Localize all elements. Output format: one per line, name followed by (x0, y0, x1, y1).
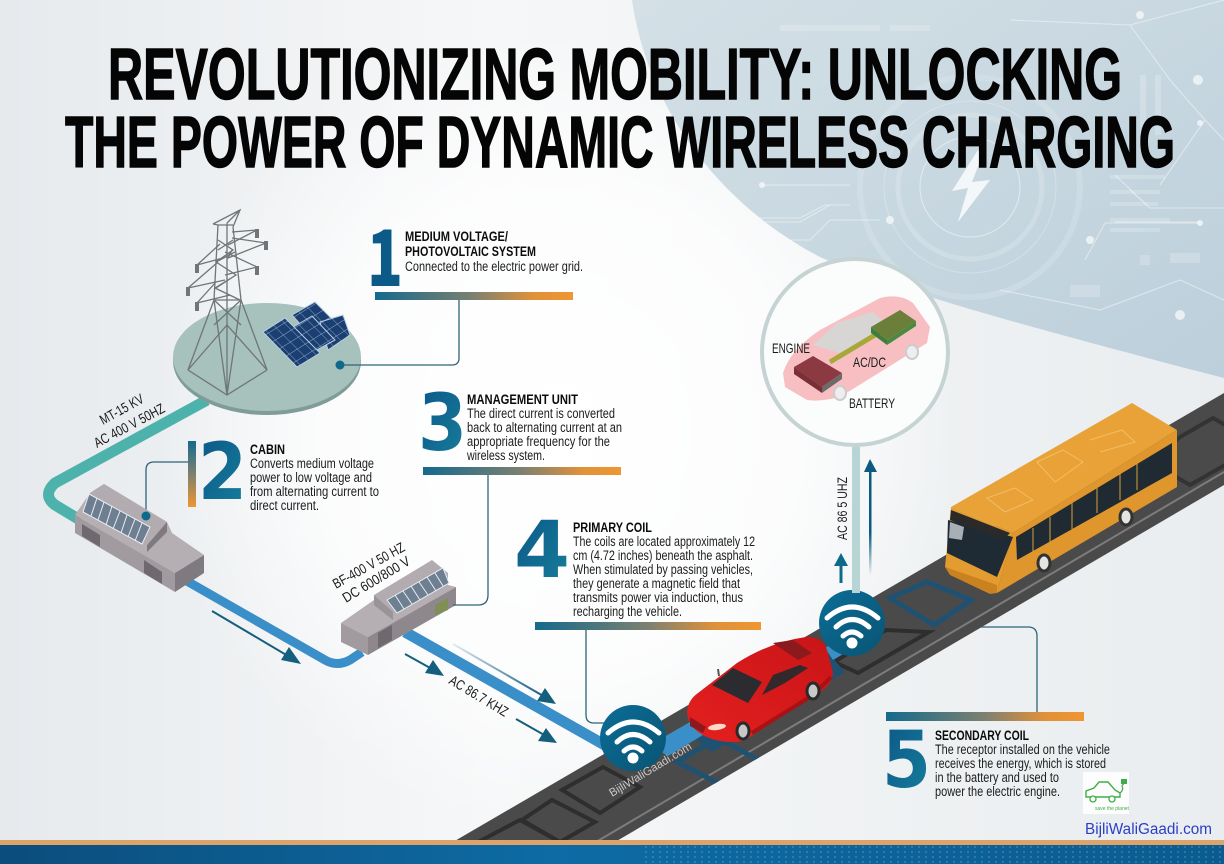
step 1 text: Connected to the electric power grid. (405, 259, 583, 274)
step 4 text: recharging the vehicle. (573, 604, 682, 619)
label: inverter output: DC 600/800 V (339, 552, 413, 606)
tech background panel (632, 0, 1224, 378)
step 5 text: receives the energy, which is stored (935, 756, 1106, 771)
step 4 text: PRIMARY COIL (573, 520, 652, 535)
step 5 bar (886, 712, 1084, 721)
step 3 bar (423, 467, 621, 475)
icon: wifi badge left (600, 705, 666, 771)
step 2 text: from alternating current to (250, 484, 379, 499)
inset labels: BATTERY (849, 395, 895, 411)
inverter building (341, 560, 456, 655)
watermark on road: BijliWaliGaadi.com (607, 741, 694, 800)
step 2 number: 2 (198, 428, 247, 518)
step 2 text: direct current. (250, 498, 319, 513)
connector: step 3 (453, 475, 488, 605)
connector: step 5 (981, 627, 1037, 712)
bus windscreen (947, 520, 1013, 577)
label: inverter output: BF-400 V 50 HZ (330, 539, 408, 592)
inset: car powertrain (762, 259, 948, 445)
stem to car inset (852, 443, 860, 593)
arrow: to primary coil upper (453, 644, 556, 704)
step 2 text: power to low voltage and (250, 470, 372, 485)
inset labels (772, 340, 895, 411)
step 4 text: When stimulated by passing vehicles, (573, 562, 753, 577)
wheels (737, 683, 819, 739)
label: AC frequency: AC 86.7 KHZ (446, 672, 512, 720)
marker dot (142, 512, 150, 520)
step 1 text: MEDIUM VOLTAGE/ (405, 229, 508, 244)
step 4 number: 4 (514, 506, 570, 596)
inset labels: ENGINE (772, 340, 810, 356)
red car (687, 637, 833, 742)
footer band (0, 840, 1224, 864)
road with coils (453, 393, 1224, 842)
step 2 bar (188, 441, 196, 507)
solar roof (387, 568, 449, 613)
marker dot (336, 360, 344, 370)
bus wheels (1038, 509, 1132, 571)
step 5 text: SECONDARY COIL (935, 728, 1029, 743)
step 2 text: Converts medium voltage (250, 456, 374, 471)
step 3 text: appropriate frequency for the (467, 434, 610, 449)
logo: green EV car: save the planet (1095, 806, 1130, 812)
title (65, 35, 1175, 183)
logo: green EV car (1083, 772, 1130, 814)
step 4 text: they generate a magnetic field that (573, 576, 740, 591)
step 1 bar (375, 292, 573, 300)
brand URL: BijliWaliGaadi.com (1085, 821, 1212, 838)
step 5 text: power the electric engine. (935, 784, 1060, 799)
step 3 number: 3 (418, 379, 467, 469)
label: MT-15 KV: MT-15 KV (97, 390, 147, 428)
step 3 text: back to alternating current at an (467, 420, 622, 435)
arrow: cabin to inverter (212, 611, 301, 664)
arrow: short up (834, 553, 848, 583)
teal cable (48, 400, 207, 520)
bus windows (1016, 443, 1172, 560)
step 3 text: The direct current is converted (467, 406, 615, 421)
step 5 number: 5 (882, 716, 931, 806)
inset labels: AC/DC (853, 354, 886, 370)
yellow bus (945, 403, 1177, 594)
step 3 text (466, 392, 622, 463)
arrow: short mid (405, 654, 444, 676)
cabin 1 building (75, 484, 204, 592)
icon: wifi badge right (819, 590, 885, 656)
step 4 text: The coils are located approximately 12 (573, 534, 755, 549)
step 3 text: wireless system. (466, 448, 545, 463)
arrow: short lower (516, 719, 557, 743)
connector: step 4 (586, 630, 605, 723)
step 4 bar (535, 622, 761, 630)
step 2 text: CABIN (250, 442, 285, 457)
solar roof (83, 494, 150, 544)
step 1 text (405, 229, 583, 274)
icon: transmission tower (188, 210, 267, 395)
label: MT-15 KV: AC 400 V 50HZ (91, 400, 168, 451)
connector: step 2 (146, 462, 188, 517)
blue cable to inverter (185, 580, 362, 664)
platform with tower and solar panels (173, 210, 361, 415)
step 4 text: cm (4.72 inches) beneath the asphalt. (573, 548, 753, 563)
blue cable to primary coil (405, 632, 610, 748)
connector: step 1 (340, 300, 459, 365)
step 1 number: 1 (367, 197, 403, 309)
icon: solar panels (263, 302, 350, 367)
step 5 text (935, 728, 1110, 799)
step 5 text: in the battery and used to (935, 770, 1059, 785)
step 4 text: transmits power via induction, thus (573, 590, 743, 605)
label: AC 86 5 UHZ: AC 86 5 UHZ (834, 477, 850, 540)
step 3 text: MANAGEMENT UNIT (467, 392, 579, 407)
step 5 text: The receptor installed on the vehicle (935, 742, 1110, 757)
arrow: long up (864, 459, 877, 575)
step 1 text: PHOTOVOLTAIC SYSTEM (405, 244, 536, 259)
step 4 text (573, 520, 755, 619)
step 2 text (250, 442, 379, 513)
